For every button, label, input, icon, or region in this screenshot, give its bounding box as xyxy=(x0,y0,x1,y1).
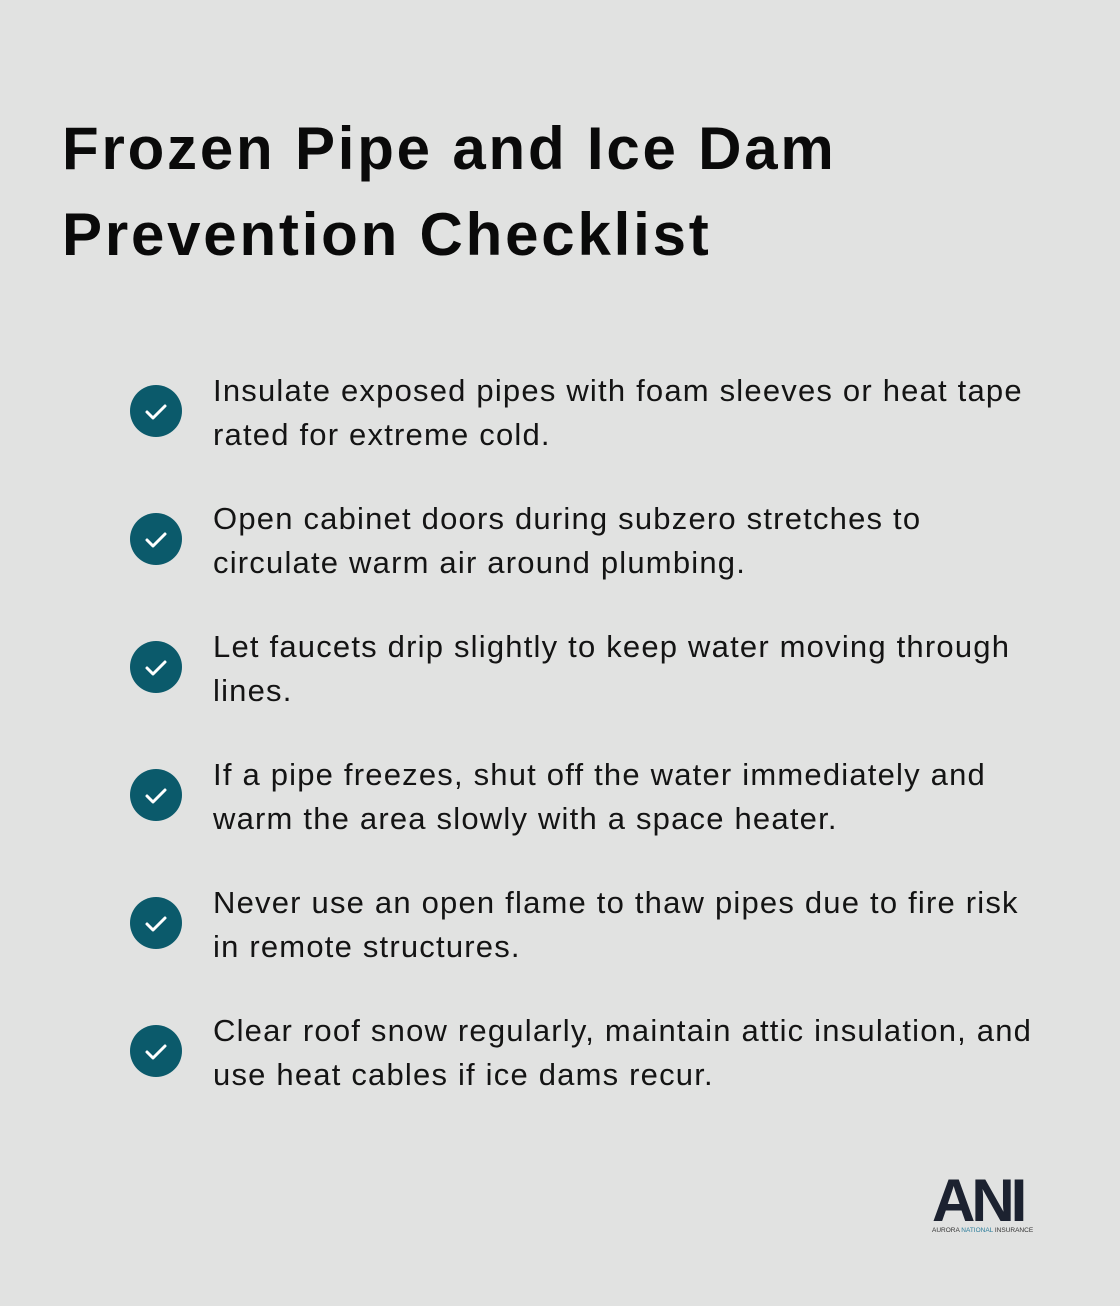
text: If a pipe freezes, shut off the water immediately and xyxy=(213,757,986,792)
item 4 xyxy=(130,757,986,836)
text: Let faucets drip slightly to keep water moving through xyxy=(213,629,1010,664)
logo: ANI xyxy=(932,1167,1023,1234)
item 6 xyxy=(130,1013,1032,1092)
text xyxy=(213,1013,1032,1092)
item 2 xyxy=(130,501,921,580)
text: in remote structures. xyxy=(213,929,521,964)
text xyxy=(213,629,1010,708)
icon: check xyxy=(130,1025,182,1077)
title: Frozen Pipe and Ice Dam xyxy=(62,115,837,182)
icon: check xyxy=(130,513,182,565)
icon: check xyxy=(130,769,182,821)
logo: AURORA NATIONAL INSURANCE xyxy=(932,1227,1033,1234)
text xyxy=(213,885,1019,964)
text xyxy=(213,757,986,836)
item 5 xyxy=(130,885,1019,964)
icon: check xyxy=(130,641,182,693)
title: Prevention Checklist xyxy=(62,201,712,268)
text: rated for extreme cold. xyxy=(213,417,551,452)
text xyxy=(213,373,1023,452)
icon: check xyxy=(130,385,182,437)
text: Open cabinet doors during subzero stretches to xyxy=(213,501,921,536)
title xyxy=(62,115,837,268)
text: circulate warm air around plumbing. xyxy=(213,545,746,580)
text: Never use an open flame to thaw pipes due to fire risk xyxy=(213,885,1019,920)
text: Insulate exposed pipes with foam sleeves or heat tape xyxy=(213,373,1023,408)
item 1 xyxy=(130,373,1023,452)
text xyxy=(213,501,921,580)
icon: check xyxy=(130,897,182,949)
text: warm the area slowly with a space heater. xyxy=(213,801,838,836)
item 3 xyxy=(130,629,1010,708)
text: Clear roof snow regularly, maintain attic insulation, and xyxy=(213,1013,1032,1048)
text: lines. xyxy=(213,673,293,708)
text: use heat cables if ice dams recur. xyxy=(213,1057,714,1092)
